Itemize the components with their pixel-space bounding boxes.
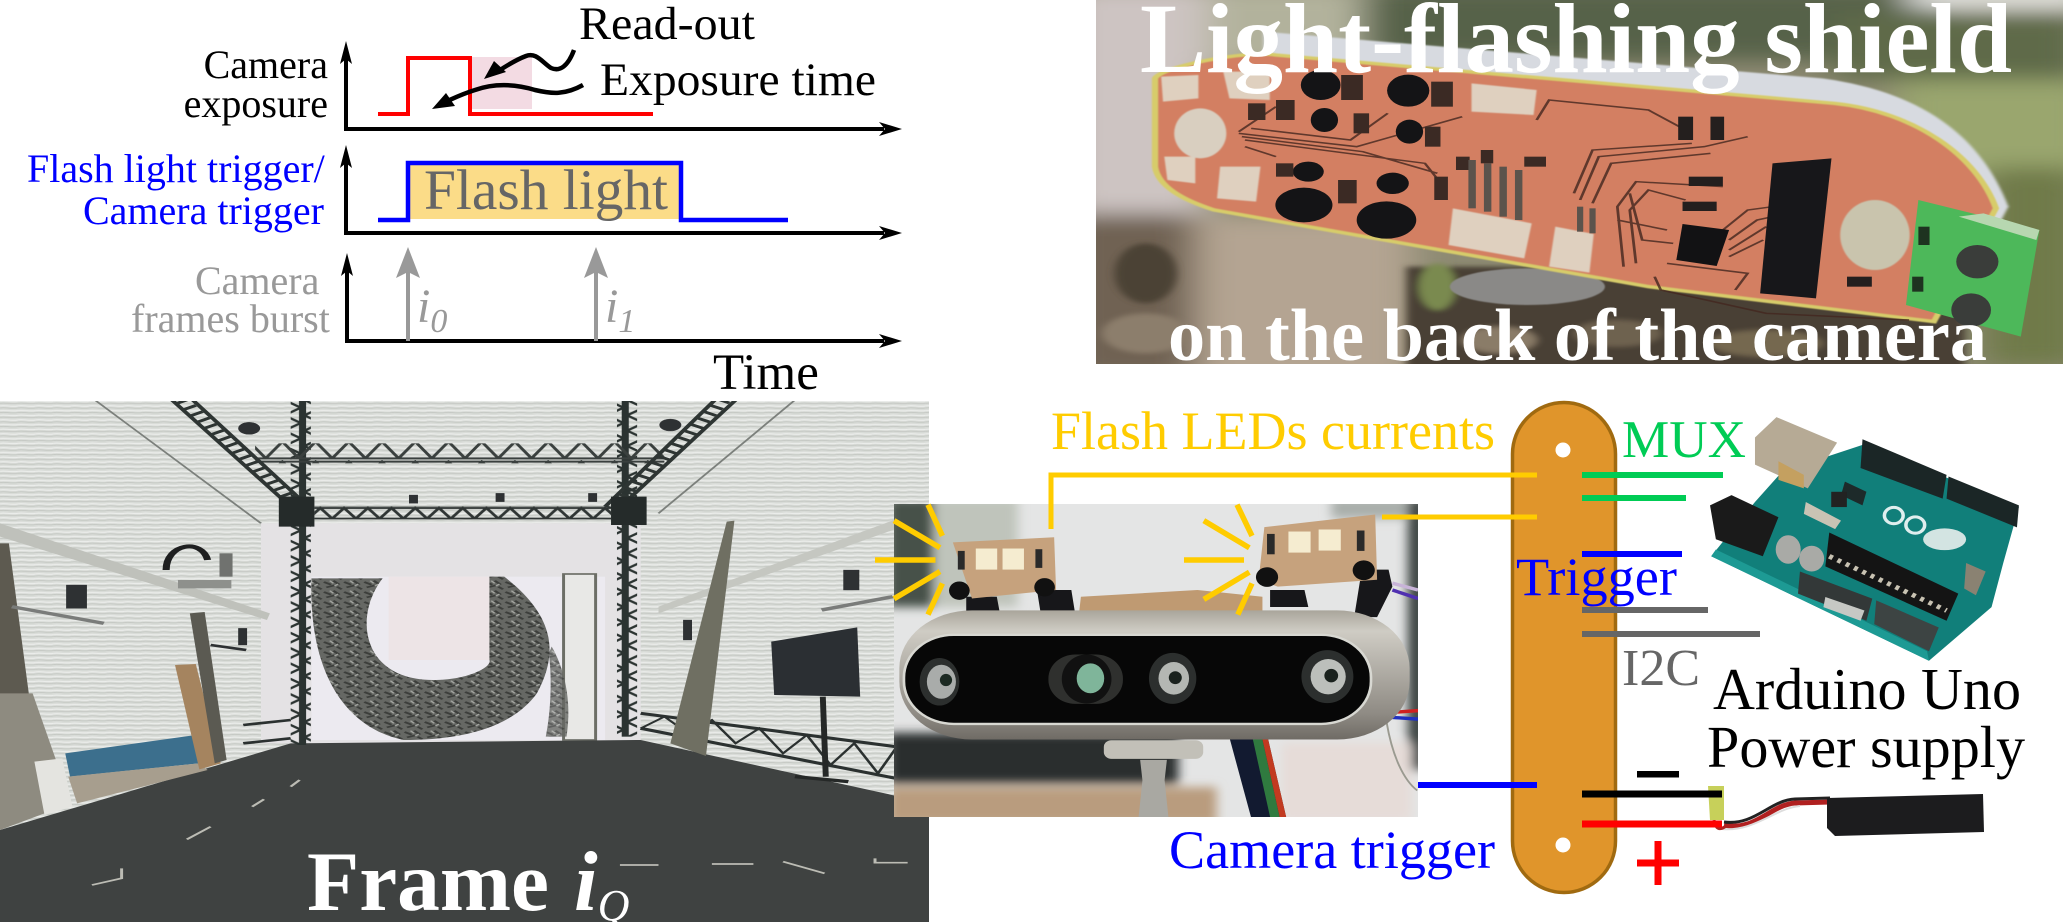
mocap cameras <box>12 419 893 650</box>
left wall shelf and clutter <box>0 400 930 830</box>
icon: flash rays left LED <box>875 505 942 615</box>
target panels <box>311 574 605 740</box>
label: flash light: Flash light <box>424 159 668 222</box>
camera photo <box>894 504 1418 817</box>
right wires <box>1387 583 1418 790</box>
right LED board <box>1256 515 1392 617</box>
label: i1: i <box>605 280 618 333</box>
camera exposure axes <box>340 41 902 136</box>
label: i0: 0 <box>430 303 447 340</box>
panel: depth camera photo with LED boards <box>880 491 1427 831</box>
blue trigger signal <box>378 163 788 220</box>
thumb wheel <box>1450 268 1605 305</box>
flash trigger axes <box>340 145 902 240</box>
label: flash light trigger / camera trigger: Camera trigger <box>83 188 324 233</box>
lens: color camera <box>1048 655 1123 704</box>
black pin header <box>1760 158 1831 298</box>
wire: flash LED currents <box>1051 475 1537 529</box>
lens: left <box>920 658 959 706</box>
arrow: frame i1 <box>584 247 608 341</box>
arrow: frame i0 <box>396 247 420 341</box>
label: camera exposure: Camera <box>204 42 328 87</box>
label: I2C: I2C <box>1622 640 1700 697</box>
shield board outline <box>1512 402 1616 892</box>
wires: battery negative <box>1582 790 1722 798</box>
center pcb <box>1079 590 1262 614</box>
label: MUX: MUX <box>1622 411 1746 469</box>
caption: on the back of the camera: on the back of the camera <box>1168 295 1987 377</box>
room photo <box>0 401 929 922</box>
label: flash light trigger / camera trigger: Flash light trigger/ <box>27 146 326 191</box>
camera body <box>899 610 1410 740</box>
label: exposure time: Exposure time <box>600 54 876 106</box>
wires: battery positive <box>1582 820 1722 828</box>
wire: camera trigger <box>1418 782 1537 788</box>
round button <box>1840 200 1910 270</box>
label: i0: i <box>417 280 430 333</box>
label: camera frames burst: frames burst <box>131 296 330 341</box>
icon: arduino uno board <box>1710 417 2019 661</box>
truss structure <box>172 400 896 778</box>
floor tape <box>92 780 908 885</box>
icon: lipo battery <box>1708 786 1984 836</box>
right wall clutter <box>670 521 860 782</box>
icon: flash rays right LED <box>1184 505 1252 615</box>
label: i1: 1 <box>618 303 635 340</box>
green terminal block <box>1906 200 2039 337</box>
white connectors <box>1161 72 1594 273</box>
flash light yellow area <box>408 163 680 219</box>
label: camera trigger: Camera trigger <box>1169 820 1495 880</box>
panel: motion capture room photo <box>0 400 931 922</box>
label: camera exposure: exposure <box>184 81 328 126</box>
wires: I2C <box>1582 610 1760 634</box>
lens: center <box>1149 653 1196 704</box>
tripod mount <box>1104 740 1203 817</box>
red exposure signal <box>378 58 653 114</box>
label: arduino uno power supply: Power supply <box>1707 714 2025 780</box>
back wall <box>261 523 641 743</box>
white camera shell <box>1264 32 2008 300</box>
panel: shield wiring diagram <box>1051 401 2025 892</box>
left LED board <box>949 537 1075 617</box>
icon: plus sign <box>1637 841 1679 885</box>
label: camera frames burst: Camera <box>195 258 320 303</box>
shield photo <box>1096 0 2063 364</box>
floor <box>0 740 930 922</box>
wires: MUX <box>1582 475 1723 498</box>
ribbon cable <box>1230 740 1286 817</box>
label: time axis: Time <box>713 345 819 401</box>
label: flash LEDs currents: Flash LEDs currents <box>1051 401 1495 461</box>
frames burst axes <box>341 253 902 348</box>
lens: right <box>1301 650 1353 703</box>
label: arduino uno power supply: Arduino Uno <box>1713 656 2021 722</box>
icon: minus sign <box>1637 771 1679 778</box>
arrow: exposure time pointer <box>432 85 583 109</box>
sm resistors <box>1678 117 1872 287</box>
label: trigger: Trigger <box>1516 547 1677 607</box>
main chip <box>1676 224 1729 266</box>
rubble and ground <box>1102 243 1965 373</box>
panel: camera and flash timing diagram <box>27 0 902 401</box>
panel: photo of light-flashing shield <box>1065 0 2063 383</box>
read-out shaded area <box>472 57 532 109</box>
wire: trigger <box>1582 551 1682 557</box>
arrow: read-out pointer <box>484 50 574 79</box>
pcb board <box>1155 54 2039 337</box>
